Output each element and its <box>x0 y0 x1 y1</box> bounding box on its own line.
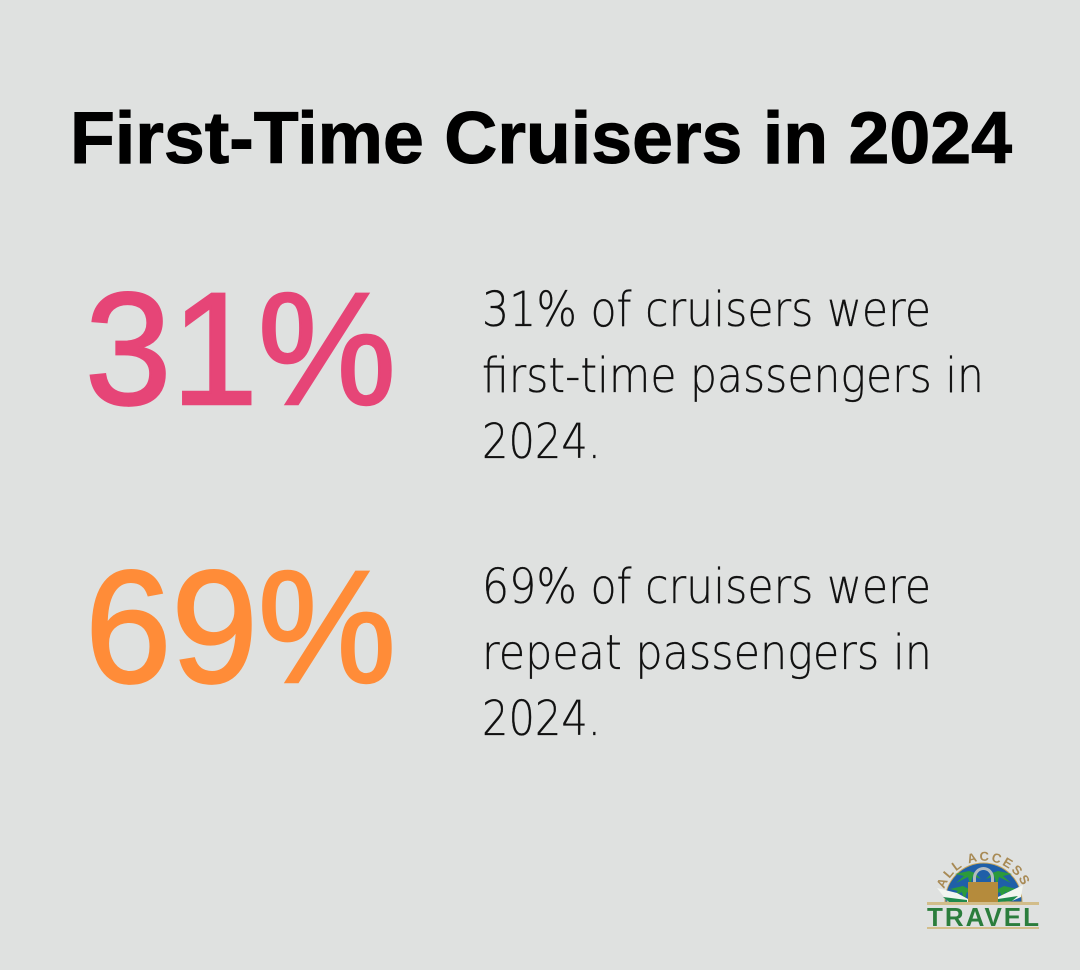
logo padlock <box>974 868 992 884</box>
text block: first-time passengers: first-time passengers in <box>482 348 984 404</box>
stat: 69%: 69% <box>85 537 396 716</box>
logo wordmark: TRAVEL <box>927 902 1039 932</box>
logo: All Access Travel <box>927 852 1039 932</box>
text block: repeat passengers: repeat passengers in <box>482 625 932 681</box>
text block: first-time passengers: 2024. <box>482 414 601 470</box>
logo arc lettering: ALL ACCESS <box>938 852 1030 889</box>
stat: 31%: 31% <box>85 259 396 438</box>
logo palms <box>950 871 1017 901</box>
logo boats <box>937 888 968 902</box>
text block: repeat passengers: 2024. <box>482 691 601 747</box>
text block: repeat passengers <box>482 559 932 747</box>
text block: first-time passengers: 31% of cruisers were <box>482 282 931 338</box>
title: First-Time Cruisers in 2024 <box>70 98 1012 179</box>
text block: repeat passengers: 69% of cruisers were <box>482 559 931 615</box>
logo globe <box>945 863 1022 902</box>
text block: first-time passengers <box>482 282 984 470</box>
logo rules <box>927 902 1039 905</box>
